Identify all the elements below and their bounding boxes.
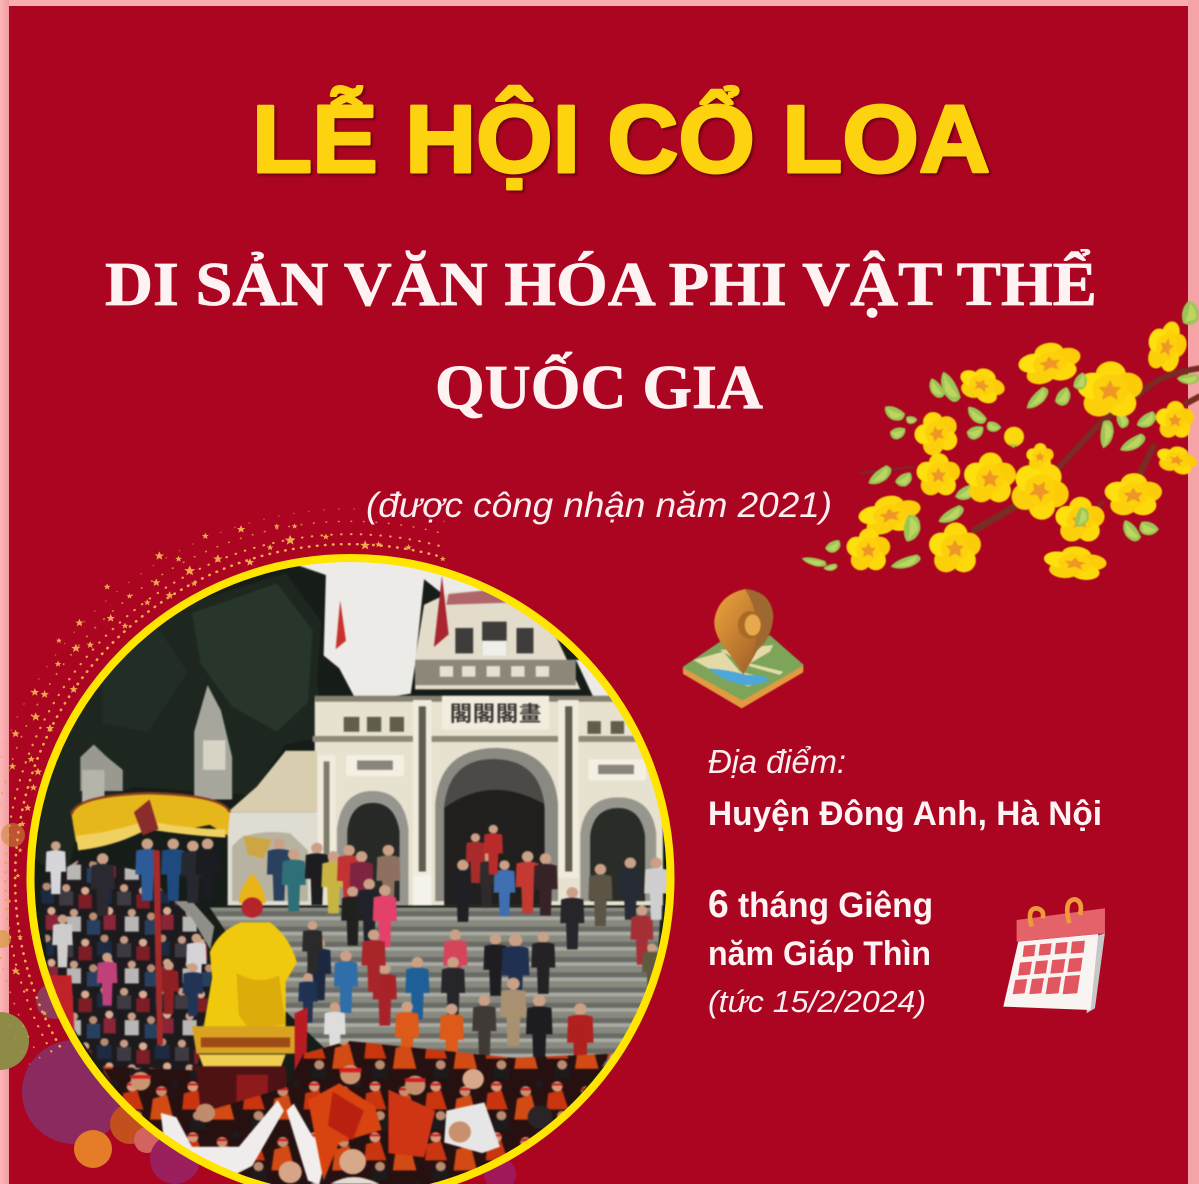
branches (860, 368, 1199, 530)
icon: map pin (684, 589, 802, 707)
central arch (435, 748, 558, 901)
gate building: 閣閣閣畫 (450, 702, 541, 726)
title: LỄ HỘI CỔ LOA (252, 85, 990, 193)
subtitle line 2: QUỐC GIA (435, 353, 763, 422)
subtitle line 1: DI SẢN VĂN HÓA PHI VẬT THỂ (105, 250, 1097, 319)
photo ring (30, 558, 670, 1184)
crowd: onlookers (46, 825, 668, 1072)
icon: calendar (1003, 899, 1105, 1013)
blossoms (846, 317, 1199, 582)
trees (36, 573, 326, 884)
banner (50, 974, 76, 1034)
location label: Địa điểm: (708, 743, 846, 780)
sky (298, 562, 610, 697)
crowd: left side (40, 859, 214, 1083)
crowd: palanquin bearers (103, 1041, 612, 1184)
date line 1: 6 tháng Giêng (708, 883, 933, 926)
location value: Huyện Đông Anh, Hà Nội (708, 795, 1102, 833)
apricot blossom branch (801, 299, 1199, 582)
leaves and buds (801, 299, 1199, 571)
canopy parasol (71, 793, 230, 1045)
deity statue on palanquin (191, 873, 309, 1110)
side arches (337, 791, 408, 905)
photo: Co Loa festival procession at the temple gate (27, 554, 679, 1184)
recognition note: (được công nhận năm 2021) (366, 486, 832, 525)
gregorian date: (tức 15/2/2024) (708, 984, 926, 1019)
flags (336, 600, 346, 649)
star dust arc (0, 509, 446, 1064)
bubbles bottom left (0, 823, 516, 1184)
date line 2: năm Giáp Thìn (708, 935, 931, 973)
stone steps (210, 908, 661, 1066)
gate building (80, 576, 663, 905)
bearers in front (130, 1065, 553, 1184)
pillars (194, 685, 232, 800)
